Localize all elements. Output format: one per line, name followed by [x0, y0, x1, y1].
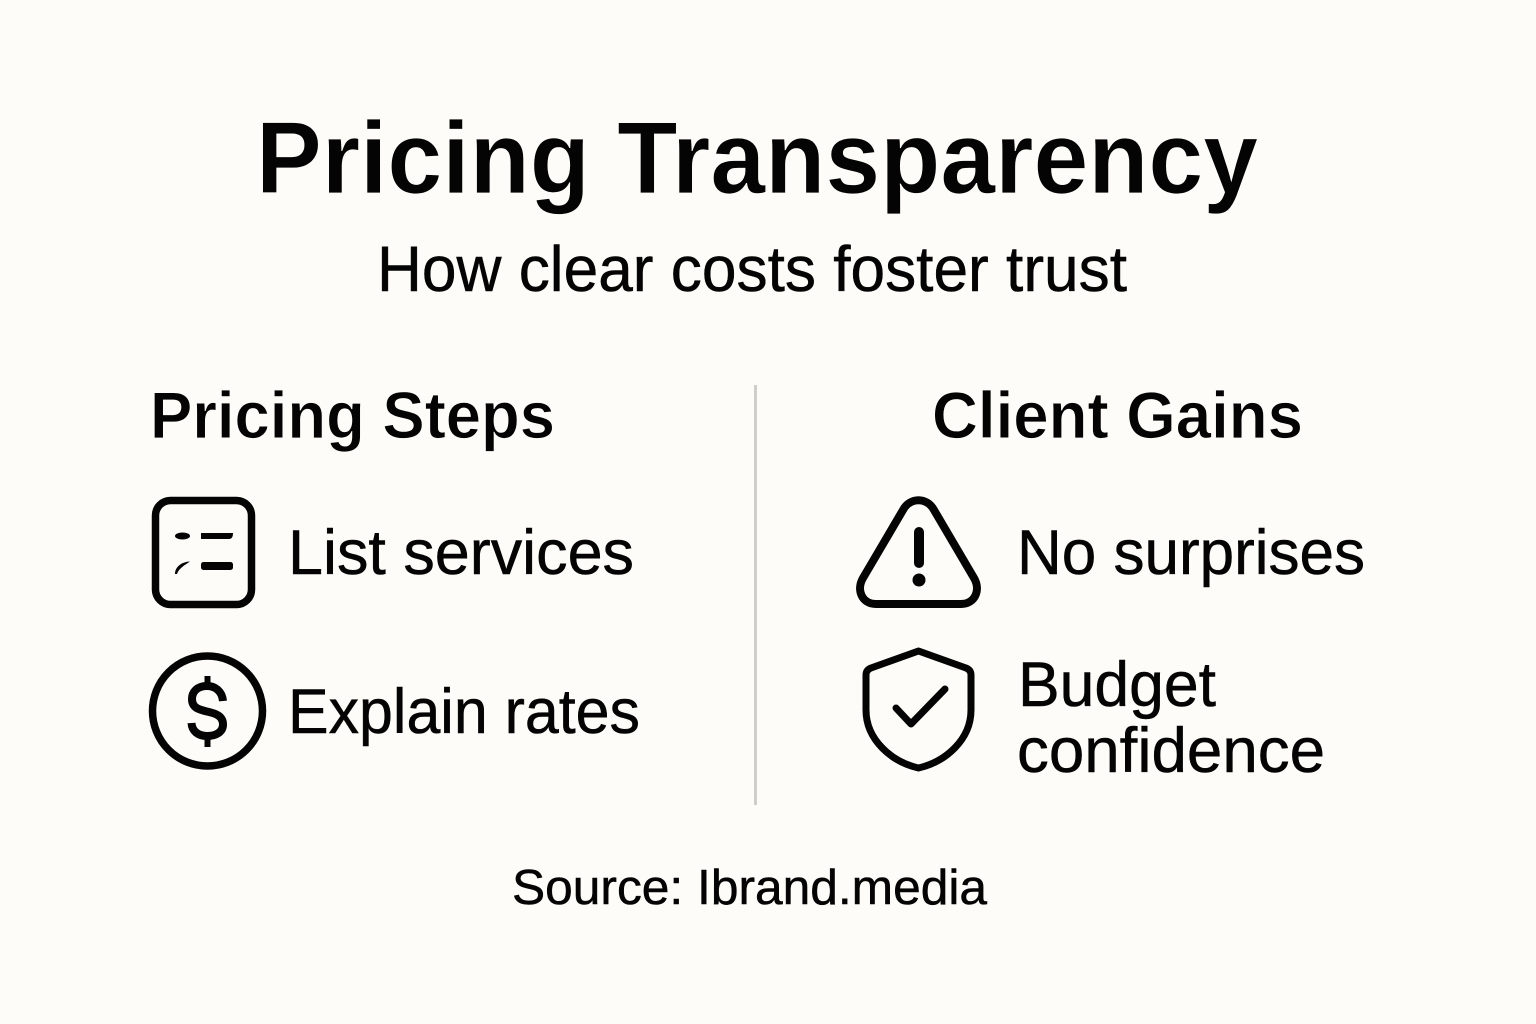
heading: client gains: Client Gains — [932, 378, 1303, 452]
icon: warning triangle — [860, 500, 977, 604]
icon: list — [156, 500, 252, 604]
title: Pricing Transparency — [256, 101, 1258, 215]
label: budget confidence — [1017, 650, 1325, 786]
label: budget confidence: Budget — [1018, 650, 1216, 720]
icon: dollar coin — [152, 656, 262, 766]
heading: pricing steps: Pricing Steps — [150, 378, 555, 452]
divider — [754, 385, 757, 805]
label: no surprises: No surprises — [1017, 518, 1365, 588]
subtitle: How clear costs foster trust — [377, 233, 1127, 305]
panel: pricing steps — [150, 378, 640, 766]
label: budget confidence: confidence — [1017, 716, 1325, 786]
panel: client gains — [860, 378, 1365, 786]
label: explain rates: Explain rates — [288, 677, 640, 747]
icon: shield check — [866, 651, 971, 768]
label: list services: List services — [288, 518, 634, 588]
source: Source: Ibrand.media — [512, 861, 988, 915]
